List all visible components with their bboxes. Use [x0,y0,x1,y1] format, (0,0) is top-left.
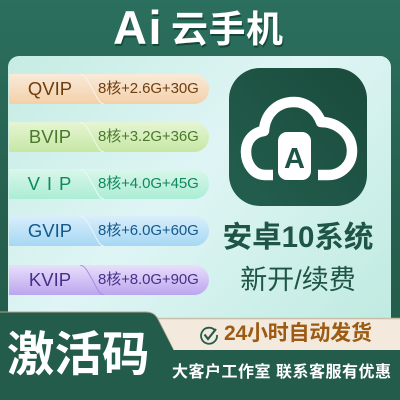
label: KVIP: KVIP [29,269,71,290]
text: 24h auto delivery: 24小时自动发货 [224,322,372,345]
heading: activation code: 激活码 [7,329,150,382]
spec: BVIP: 8核+3.2G+36G [98,128,199,145]
label: VIP: VIP [28,173,78,194]
label: BVIP: BVIP [29,126,71,147]
heading: Android 10 system: 安卓10系统 [223,221,373,254]
label: GVIP: GVIP [28,220,72,241]
spec: VIP: 8核+4.0G+45G [98,175,199,192]
title: 云手机 [171,9,284,50]
bottom dark banner [0,312,400,350]
row: QVIP [9,74,209,104]
title: Ai [113,1,163,54]
text: new / renew: 新开/续费 [240,265,356,295]
icon: check badge [200,326,218,345]
row: BVIP [9,122,209,152]
spec: QVIP: 8核+2.6G+30G [98,80,199,97]
icon: cloud app: A [284,143,305,175]
text: contact for offers: 大客户工作室 联系客服有优惠 [172,364,391,381]
row: GVIP [9,216,209,246]
label: QVIP: QVIP [28,78,72,99]
row: VIP [9,169,209,199]
title [113,1,284,54]
spec: GVIP: 8核+6.0G+60G [98,222,199,239]
main light panel [8,56,391,346]
icon: cloud app [229,68,367,206]
row: KVIP [9,265,209,295]
spec: KVIP: 8核+8.0G+90G [98,271,199,288]
